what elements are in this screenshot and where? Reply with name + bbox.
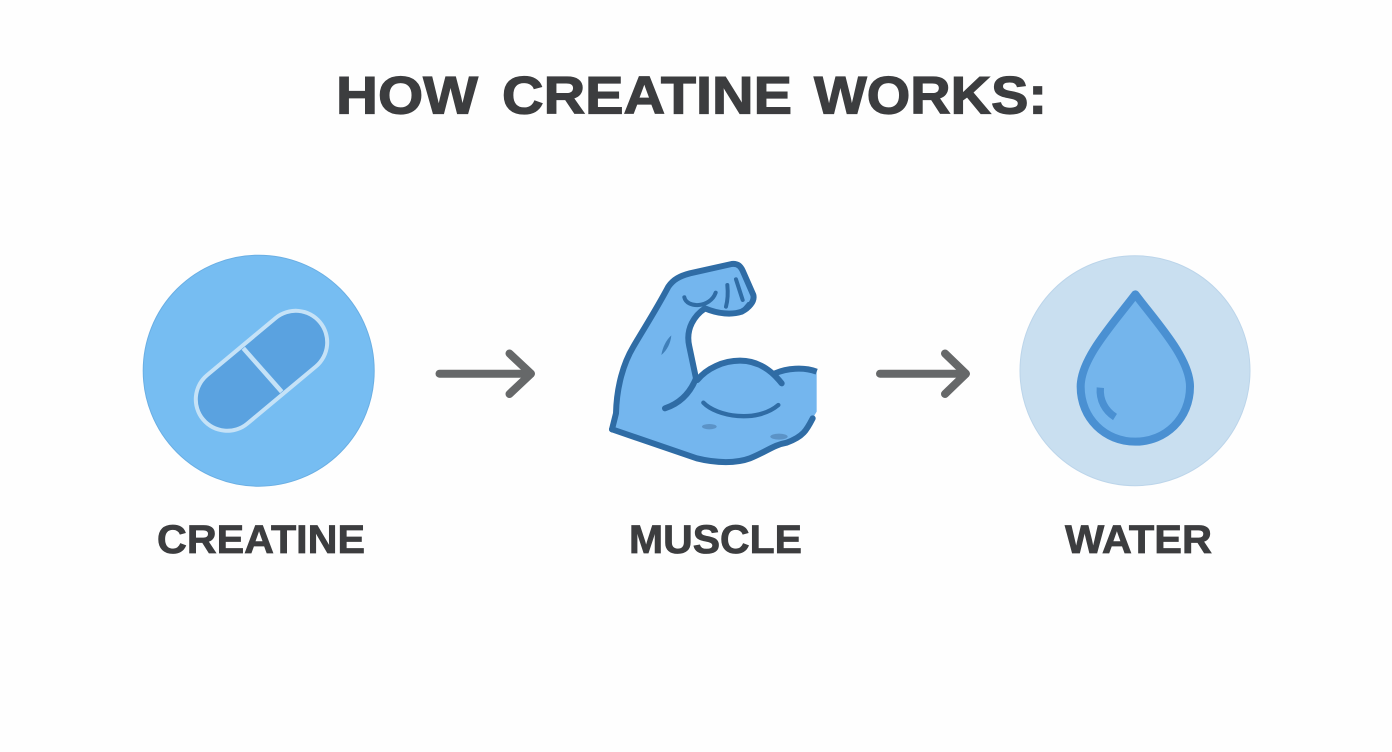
arrow: creatine to muscle bbox=[440, 354, 531, 394]
title: CREATINE bbox=[502, 66, 792, 126]
icon: flexed muscle arm bbox=[612, 264, 817, 462]
label: creatine: CREATINE bbox=[157, 518, 365, 562]
icon: water drop in circle bbox=[1020, 256, 1250, 486]
title: WORKS: bbox=[814, 66, 1047, 126]
label: muscle: MUSCLE bbox=[629, 518, 802, 562]
arrow: muscle to water bbox=[880, 354, 966, 394]
label: water: WATER bbox=[1065, 518, 1212, 562]
title: HOW bbox=[336, 66, 478, 126]
icon: creatine capsule in circle bbox=[143, 255, 374, 486]
title bbox=[336, 66, 1047, 126]
